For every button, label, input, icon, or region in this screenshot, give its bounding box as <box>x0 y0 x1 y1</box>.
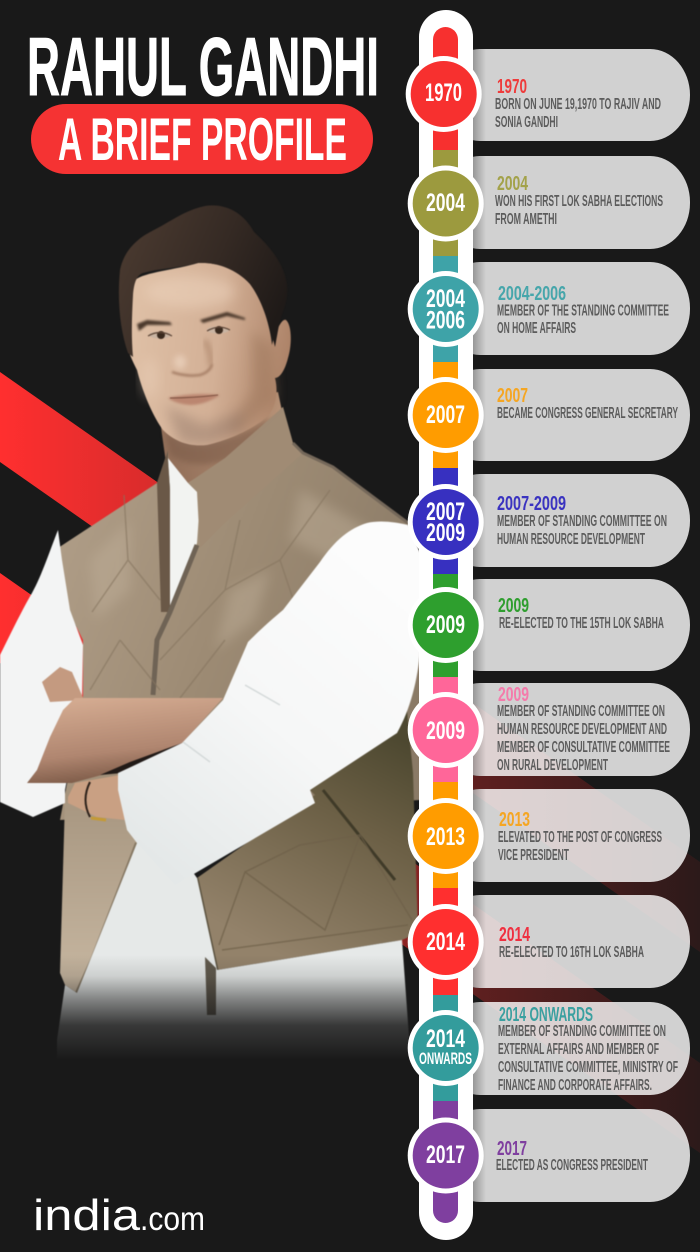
forearm <box>27 698 223 783</box>
badge: 2004-2006: 2006 <box>426 306 465 334</box>
card: 2004: FROM AMETHI <box>495 211 557 228</box>
right sleeve <box>118 522 420 885</box>
vest light patches <box>90 490 370 650</box>
subtitle pill <box>31 104 373 174</box>
neck <box>160 392 285 490</box>
timeline spine <box>419 10 473 1240</box>
hand behind arm <box>42 667 84 702</box>
zipper pull <box>205 957 216 1015</box>
logo: india.com <box>33 1191 205 1240</box>
badge: 2009 pink <box>408 692 484 768</box>
card: 2004-2006 <box>440 262 690 355</box>
badge: 1970 <box>406 56 482 132</box>
shirt collar and placket <box>163 458 226 612</box>
logo: india.com: .com <box>140 1200 205 1237</box>
card: 2004-2006: 2004-2006 <box>498 283 566 305</box>
card: 2009 re-elected <box>440 579 690 671</box>
title: RAHUL GANDHI <box>27 20 379 113</box>
lower kurta <box>57 840 412 1078</box>
left vest zip <box>77 843 137 993</box>
badge: 2007-2009: 2009 <box>426 519 465 547</box>
nose <box>172 340 212 376</box>
chin shadow on neck <box>165 418 270 464</box>
lower hand <box>68 775 125 820</box>
badge: 2014 onwards: 2014 <box>426 1025 465 1053</box>
card: 1970: SONIA GANDHI <box>495 114 558 131</box>
card: 2014 <box>440 895 690 988</box>
badge: 2009 green: 2009 <box>426 611 465 639</box>
card: 2009 committees <box>440 683 690 776</box>
face shading <box>141 276 275 445</box>
badge: 2004 <box>408 166 484 242</box>
badge: 2013: 2013 <box>426 823 465 851</box>
badge: 2004: 2004 <box>426 189 465 217</box>
vest collar flaps <box>157 407 408 612</box>
badge: 2007-2009: 2007 <box>426 498 465 526</box>
timeline cards <box>440 49 690 1202</box>
badge: 2007: 2007 <box>426 401 465 429</box>
card: 2004 <box>440 156 690 249</box>
card: 1970: 1970 <box>497 76 527 98</box>
card: 2014 onwards: 2014 ONWARDS <box>499 1004 593 1026</box>
badge: 2007 <box>408 377 484 453</box>
card: 1970 <box>440 49 690 141</box>
card: 2009 re-elected: 2009 <box>498 595 529 617</box>
badge: 2004-2006 <box>408 271 484 347</box>
badge: 2007-2009 <box>408 484 484 560</box>
logo: india.com: india <box>33 1191 141 1240</box>
left vest panel <box>60 800 137 993</box>
card: 2007-2009 <box>440 474 690 567</box>
badge: 2014: 2014 <box>426 928 465 956</box>
quilted vest upper body <box>58 407 420 820</box>
right vest panel <box>197 690 418 970</box>
head skin <box>128 263 291 445</box>
card: 2013: VICE PRESIDENT <box>498 847 569 864</box>
lower body fade <box>50 955 418 1080</box>
eyebrows <box>137 312 245 331</box>
badge: 2013 <box>408 798 484 874</box>
right vest quilting and pocket <box>197 790 412 970</box>
card: 2014 onwards <box>440 1002 690 1095</box>
badge: 2014 onwards <box>408 1010 484 1086</box>
vest zipper and quilting <box>90 490 330 698</box>
card: 2017 <box>440 1109 690 1202</box>
badge: 2014 <box>408 904 484 980</box>
badge: 1970: 1970 <box>425 79 462 107</box>
wrist band and ring <box>86 782 106 820</box>
badge: 2014 onwards: ONWARDS <box>419 1049 472 1068</box>
portrait photo of Rahul Gandhi <box>0 205 420 1078</box>
badge: 2017 <box>408 1118 484 1194</box>
badge: 2009 pink: 2009 <box>426 717 465 745</box>
eyes <box>148 326 230 339</box>
left sleeve <box>0 530 83 817</box>
card: 2013: 2013 <box>499 809 530 831</box>
red diagonal stripes <box>0 372 700 1153</box>
badge: 2004-2006: 2004 <box>426 285 465 313</box>
forearm shadow <box>100 743 182 775</box>
subtitle: A BRIEF PROFILE <box>58 106 347 173</box>
card: 2004: 2004 <box>497 173 529 195</box>
card: 2017: 2017 <box>497 1138 527 1160</box>
card: 2007 <box>440 369 690 461</box>
card: 2007-2009: 2007-2009 <box>497 493 566 515</box>
card: 2013 <box>440 789 690 882</box>
card: 2004-2006: ON HOME AFFAIRS <box>497 320 576 337</box>
hair <box>119 205 287 357</box>
badge: 2009 green <box>408 587 484 663</box>
card: 2009 committees: 2009 <box>498 684 529 706</box>
timeline badges <box>406 56 484 1194</box>
card: 2009 committees: ON RURAL DEVELOPMENT <box>497 757 608 774</box>
mouth <box>168 394 220 405</box>
badge: 2017: 2017 <box>426 1141 465 1169</box>
sleeve folds <box>183 685 280 762</box>
card: 2014: 2014 <box>499 924 531 946</box>
card: 2007: 2007 <box>497 385 528 407</box>
